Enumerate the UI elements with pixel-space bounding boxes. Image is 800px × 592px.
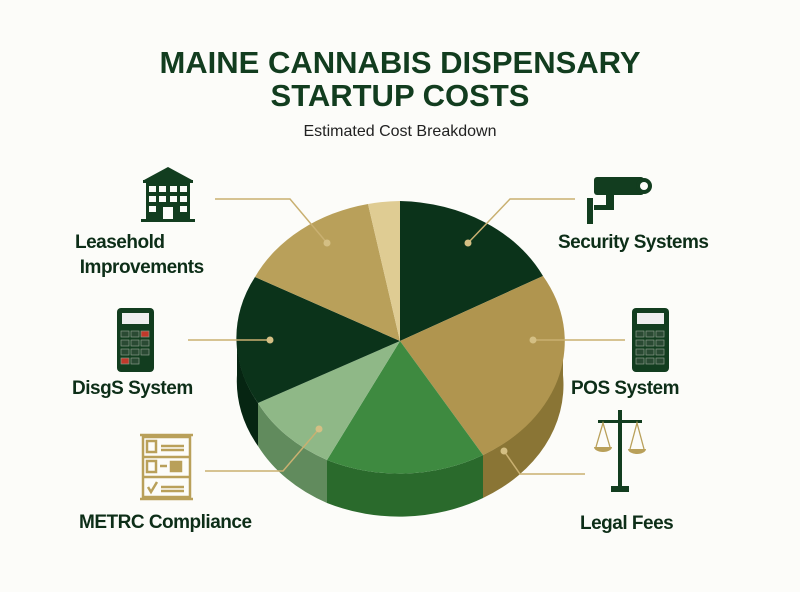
pie chart	[236, 201, 565, 517]
icon: scales	[594, 410, 646, 492]
icon: clipboard	[140, 435, 193, 499]
label: Leasehold Improvements: Improvements	[80, 257, 204, 278]
icon: calculator right	[632, 308, 669, 372]
subtitle: Estimated Cost Breakdown	[304, 123, 496, 140]
label: DisgS System: DisgS System	[72, 378, 193, 399]
icon: security camera	[587, 177, 652, 224]
label: POS System: POS System	[571, 378, 679, 399]
label: Security Systems: Security Systems	[558, 232, 708, 253]
icon: building	[141, 167, 195, 222]
title: MAINE CANNABIS DISPENSARY	[159, 45, 641, 80]
label: METRC Compliance: METRC Compliance	[79, 512, 252, 533]
title	[159, 45, 641, 113]
leader lines	[188, 199, 625, 474]
label: Leasehold Improvements: Leasehold	[75, 232, 164, 253]
label: Leasehold Improvements	[75, 232, 204, 278]
title: STARTUP COSTS	[271, 78, 529, 113]
icon: calculator left	[117, 308, 154, 372]
label: Legal Fees: Legal Fees	[580, 513, 673, 534]
